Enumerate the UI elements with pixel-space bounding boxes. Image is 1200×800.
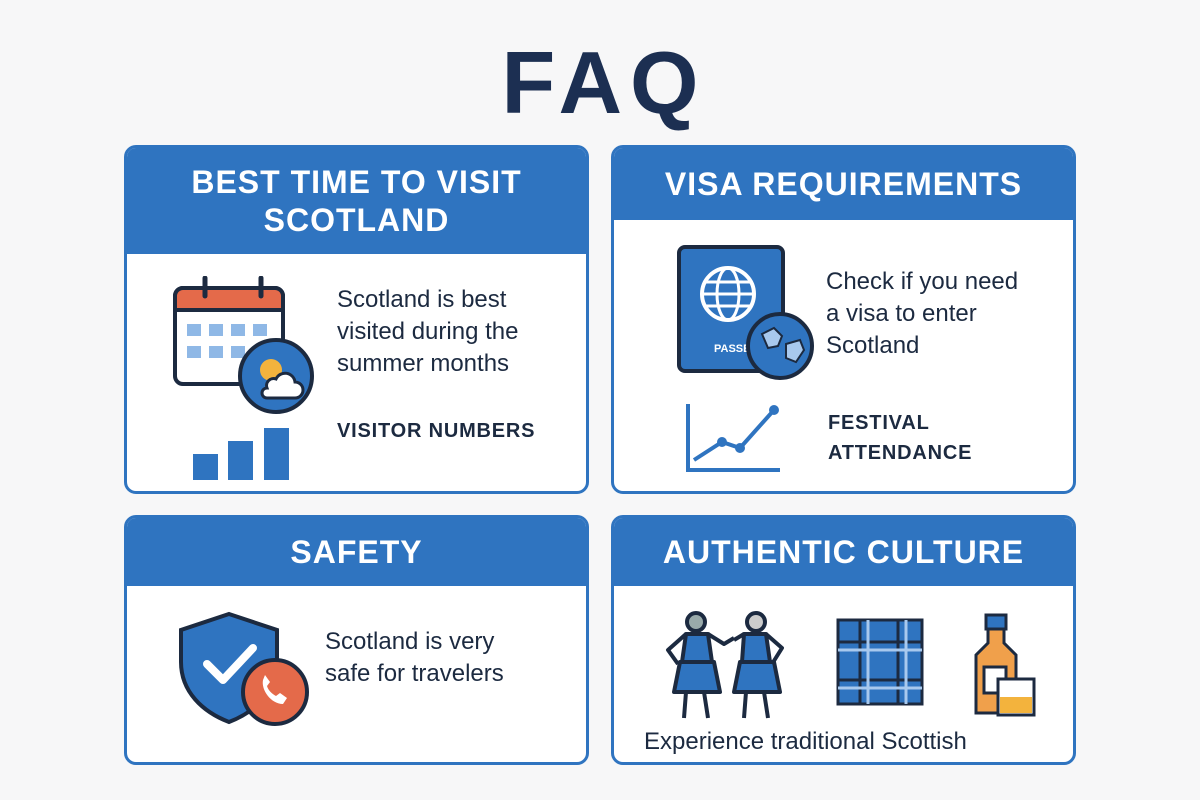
panel: visa [611, 145, 1076, 494]
icon: passport with globe [677, 245, 814, 380]
text: visa: Check if you need [826, 268, 1018, 295]
text: best time: visited during the [337, 318, 518, 345]
heading: culture [614, 518, 1073, 586]
icon: whisky bottle and glass [974, 614, 1036, 716]
text: best time: Scotland is best [337, 286, 506, 313]
panel: safety [124, 515, 589, 765]
label: festival attendance [828, 412, 972, 464]
icon: line chart [686, 404, 780, 472]
text: culture: Experience traditional Scottish [644, 728, 967, 755]
heading: best time: SCOTLAND [264, 202, 449, 238]
text: safety [325, 628, 504, 687]
text: safety: safe for travelers [325, 660, 504, 687]
title: FAQ [502, 33, 706, 132]
text: visa: a visa to enter [826, 300, 977, 327]
heading: safety [127, 518, 586, 586]
text: best time: summer months [337, 350, 509, 377]
heading: best time [127, 148, 586, 254]
heading: visa [614, 148, 1073, 220]
heading: safety: SAFETY [290, 534, 423, 570]
heading: culture: AUTHENTIC CULTURE [663, 534, 1024, 570]
panel: culture [611, 515, 1076, 765]
text: best time [337, 286, 518, 377]
panel: best time [124, 145, 589, 494]
label: festival attendance: ATTENDANCE [828, 442, 972, 464]
icon: tartan [836, 618, 924, 706]
icon: bar chart [193, 428, 289, 480]
icon: shield with phone [179, 612, 309, 726]
icon: dancers [666, 611, 784, 718]
icon: passport with globe: PASSE [714, 343, 750, 355]
icon: calendar with sun [173, 276, 314, 414]
text: safety: Scotland is very [325, 628, 494, 655]
label: festival attendance: FESTIVAL [828, 412, 930, 434]
heading: best time: BEST TIME TO VISIT [191, 164, 522, 200]
label: visitor numbers: VISITOR NUMBERS [337, 420, 535, 442]
text: visa: Scotland [826, 332, 919, 359]
heading: visa: VISA REQUIREMENTS [665, 166, 1022, 202]
text: visa [826, 268, 1018, 359]
